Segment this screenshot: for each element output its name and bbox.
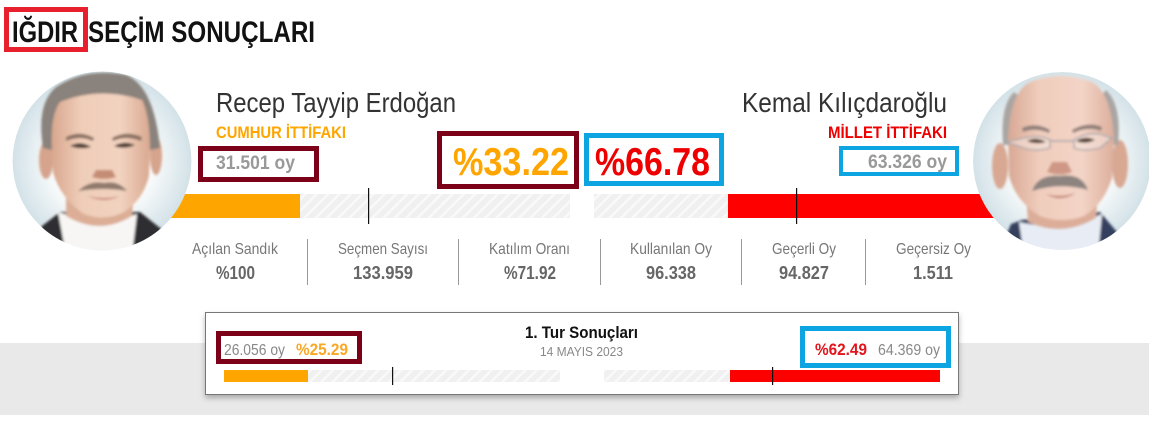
first round right bar (604, 367, 940, 385)
portrait: Kemal Kılıçdaroğlu (973, 72, 1149, 255)
first round left result: 26.056 oy (224, 342, 285, 359)
candidate right: name, alliance, votes: MİLLET İTTİFAKI (828, 123, 947, 142)
left vote bar (170, 188, 570, 224)
statistics row: 133.959 (353, 263, 413, 283)
portrait: Recep Tayyip Erdoğan (12, 72, 192, 255)
statistics row: Açılan Sandık (192, 241, 279, 258)
panel: first round results (206, 312, 958, 394)
statistics row: Geçersiz Oy (896, 241, 971, 258)
first round right result: %62.49 (815, 340, 867, 359)
first round date: 14 MAYIS 2023 (540, 344, 623, 359)
statistics row: 1.511 (913, 263, 953, 283)
title: SEÇİM SONUÇLARI (88, 16, 315, 49)
candidate left: name, alliance, votes: Recep Tayyip Erdoğan (216, 87, 456, 118)
right vote bar (594, 188, 1003, 224)
statistics row: Katılım Oranı (489, 241, 570, 258)
statistics row: Kullanılan Oy (630, 241, 712, 258)
candidate left: name, alliance, votes: CUMHUR İTTİFAKI (216, 123, 346, 142)
first round left result: %25.29 (296, 340, 348, 359)
candidate right: name, alliance, votes (742, 87, 957, 174)
candidate right: name, alliance, votes: Kemal Kılıçdaroğlu (742, 87, 947, 118)
statistics row (192, 239, 971, 285)
candidate left: name, alliance, votes: 31.501 oy (216, 153, 295, 174)
statistics row: Geçerli Oy (772, 241, 836, 258)
background band (0, 343, 1149, 415)
candidate left: name, alliance, votes (200, 87, 456, 180)
percentage: left (440, 134, 576, 186)
statistics row: 94.827 (779, 263, 829, 283)
statistics row: Seçmen Sayısı (338, 241, 428, 258)
percentage: right: %66.78 (595, 141, 710, 184)
first round left result (218, 334, 360, 362)
candidate right: name, alliance, votes: 63.326 oy (868, 152, 947, 173)
first round right result: 64.369 oy (878, 342, 940, 359)
statistics row: %100 (216, 263, 255, 283)
first round right result (802, 328, 948, 366)
title: IĞDIR (12, 15, 78, 49)
percentage: left: %33.22 (453, 141, 569, 184)
statistics row: 96.338 (646, 263, 696, 283)
title (6, 10, 315, 50)
statistics row: %71.92 (504, 263, 556, 283)
first round left bar (224, 367, 560, 385)
first round heading: 1. Tur Sonuçları (525, 323, 638, 342)
